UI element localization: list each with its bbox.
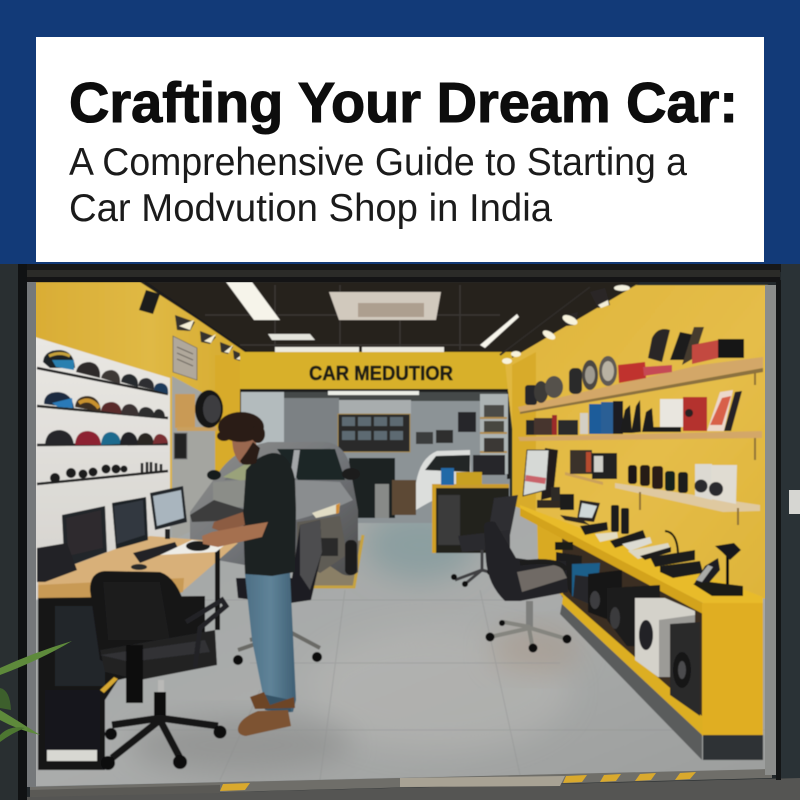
shirt — [243, 453, 296, 576]
desk monitors and keyboard — [62, 506, 107, 564]
yellow pillar — [215, 355, 241, 475]
back room white car — [416, 450, 471, 510]
track lights right — [500, 285, 630, 364]
left wall yellow — [34, 282, 245, 500]
niche behind counter — [538, 525, 702, 722]
end block — [702, 603, 763, 736]
blue header background — [0, 0, 800, 264]
track lights left — [139, 282, 252, 368]
near arm — [202, 522, 268, 547]
silver car — [190, 442, 360, 576]
back room — [240, 389, 510, 523]
right office chair — [484, 522, 572, 652]
yellow display counter — [520, 505, 763, 760]
wood shelf 1 with products — [518, 327, 763, 414]
far office chair — [451, 495, 518, 587]
reception counter — [432, 468, 509, 553]
person — [202, 412, 296, 736]
parking bay floor and line — [300, 535, 363, 587]
skirting — [560, 604, 702, 760]
left door frame — [0, 264, 36, 800]
helmet shelves — [37, 368, 168, 484]
left wall grey section — [172, 376, 216, 540]
leg — [537, 518, 563, 597]
shop photo scene — [0, 264, 800, 800]
left desk — [37, 486, 238, 770]
floor tile joints — [60, 590, 800, 780]
dark storefront frame — [0, 264, 800, 800]
ceiling lights and AC unit — [226, 282, 519, 352]
wood shelf 3 with bottles and speakers — [615, 464, 760, 512]
helmets — [43, 350, 168, 483]
ceiling — [140, 282, 640, 365]
small shelf and boxes — [565, 450, 617, 485]
counter speaker boxes — [555, 542, 700, 716]
floor — [34, 500, 768, 787]
right wall monitor and desk items — [523, 448, 629, 534]
title card — [36, 37, 764, 262]
right door frame — [765, 264, 800, 780]
wall brackets — [640, 372, 755, 525]
far arm — [212, 512, 245, 532]
sign text: CAR MEDUTIOR — [309, 363, 454, 385]
poster — [173, 336, 197, 380]
counter top — [520, 505, 763, 604]
shoes — [250, 692, 295, 709]
threshold strip with hazard marks — [18, 769, 800, 800]
subtitle line 1: A Comprehensive Guide to Starting a — [69, 141, 687, 184]
front office chair — [90, 571, 226, 770]
second office chair — [233, 520, 322, 665]
jeans — [245, 572, 296, 713]
right wall — [505, 285, 768, 600]
white helmet panel — [35, 337, 170, 600]
potted plant leaves — [0, 641, 72, 742]
head — [232, 434, 258, 463]
wood shelf 2 with products — [518, 390, 762, 441]
back wall yellow band — [240, 352, 512, 390]
subtitle line 2: Car Modvution Shop in India — [69, 187, 552, 230]
wall wheel on wood shelf — [174, 390, 223, 459]
niche floor — [562, 594, 702, 735]
counter front — [520, 508, 703, 614]
main title: Crafting Your Dream Car: — [69, 71, 738, 135]
counter gadgets — [580, 522, 743, 596]
door frame top beam — [0, 264, 800, 272]
